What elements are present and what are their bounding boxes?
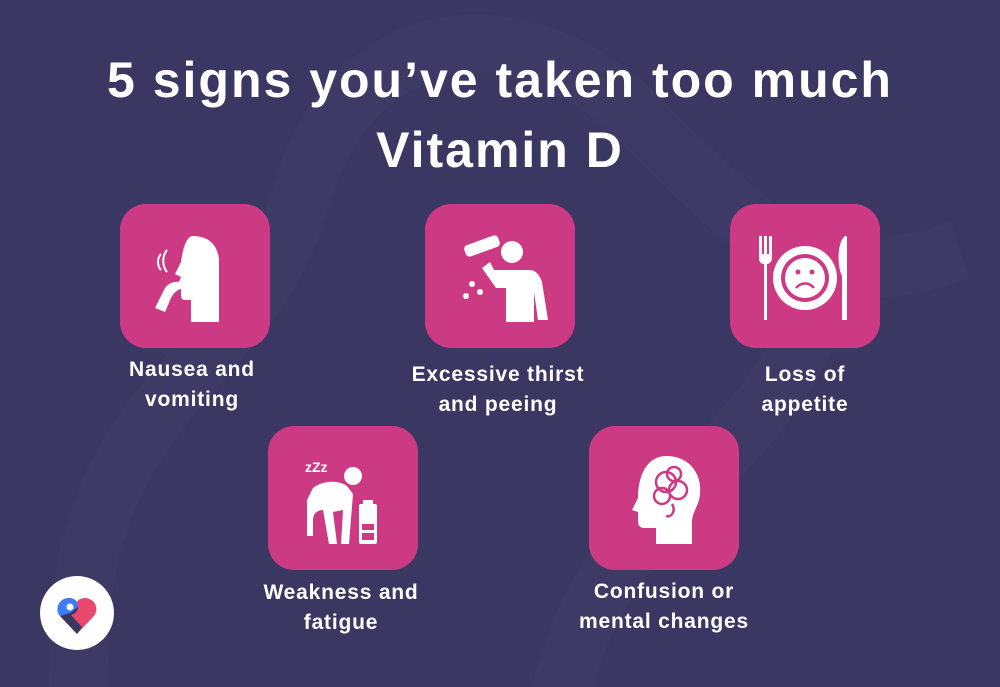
- label: weakness: Weakness and: [263, 581, 419, 604]
- label: weakness: [263, 581, 419, 634]
- panel: appetite: [730, 204, 880, 348]
- icon: tired person with battery: zZz: [305, 459, 328, 475]
- label: confusion: Confusion or: [594, 580, 734, 603]
- label: confusion: [579, 580, 749, 633]
- label: thirst: and peeing: [439, 393, 557, 416]
- label: appetite: [762, 363, 848, 416]
- icon: drinking person: [463, 235, 548, 322]
- panel: thirst: [425, 204, 575, 348]
- label: weakness: fatigue: [304, 611, 378, 634]
- icon: sad plate: [759, 236, 847, 320]
- title: Vitamin D: [376, 122, 624, 178]
- title: 5 signs you’ve taken too much: [107, 52, 893, 108]
- label: confusion: mental changes: [579, 610, 749, 633]
- label: nausea: [129, 358, 255, 411]
- panel: confusion: [589, 426, 739, 570]
- icon: vomiting head: [155, 236, 219, 322]
- panel: weakness: [268, 426, 418, 570]
- label: appetite: appetite: [762, 393, 848, 416]
- label: thirst: [412, 363, 584, 416]
- icon: tired person with battery: [305, 459, 377, 544]
- label: nausea: Nausea and: [129, 358, 255, 381]
- label: thirst: Excessive thirst: [412, 363, 584, 386]
- label: nausea: vomiting: [145, 388, 239, 411]
- panel: nausea: [120, 204, 270, 348]
- label: appetite: Loss of: [765, 363, 845, 386]
- title: [107, 52, 893, 178]
- logo: [40, 576, 114, 650]
- icon: tangled head: [632, 456, 700, 544]
